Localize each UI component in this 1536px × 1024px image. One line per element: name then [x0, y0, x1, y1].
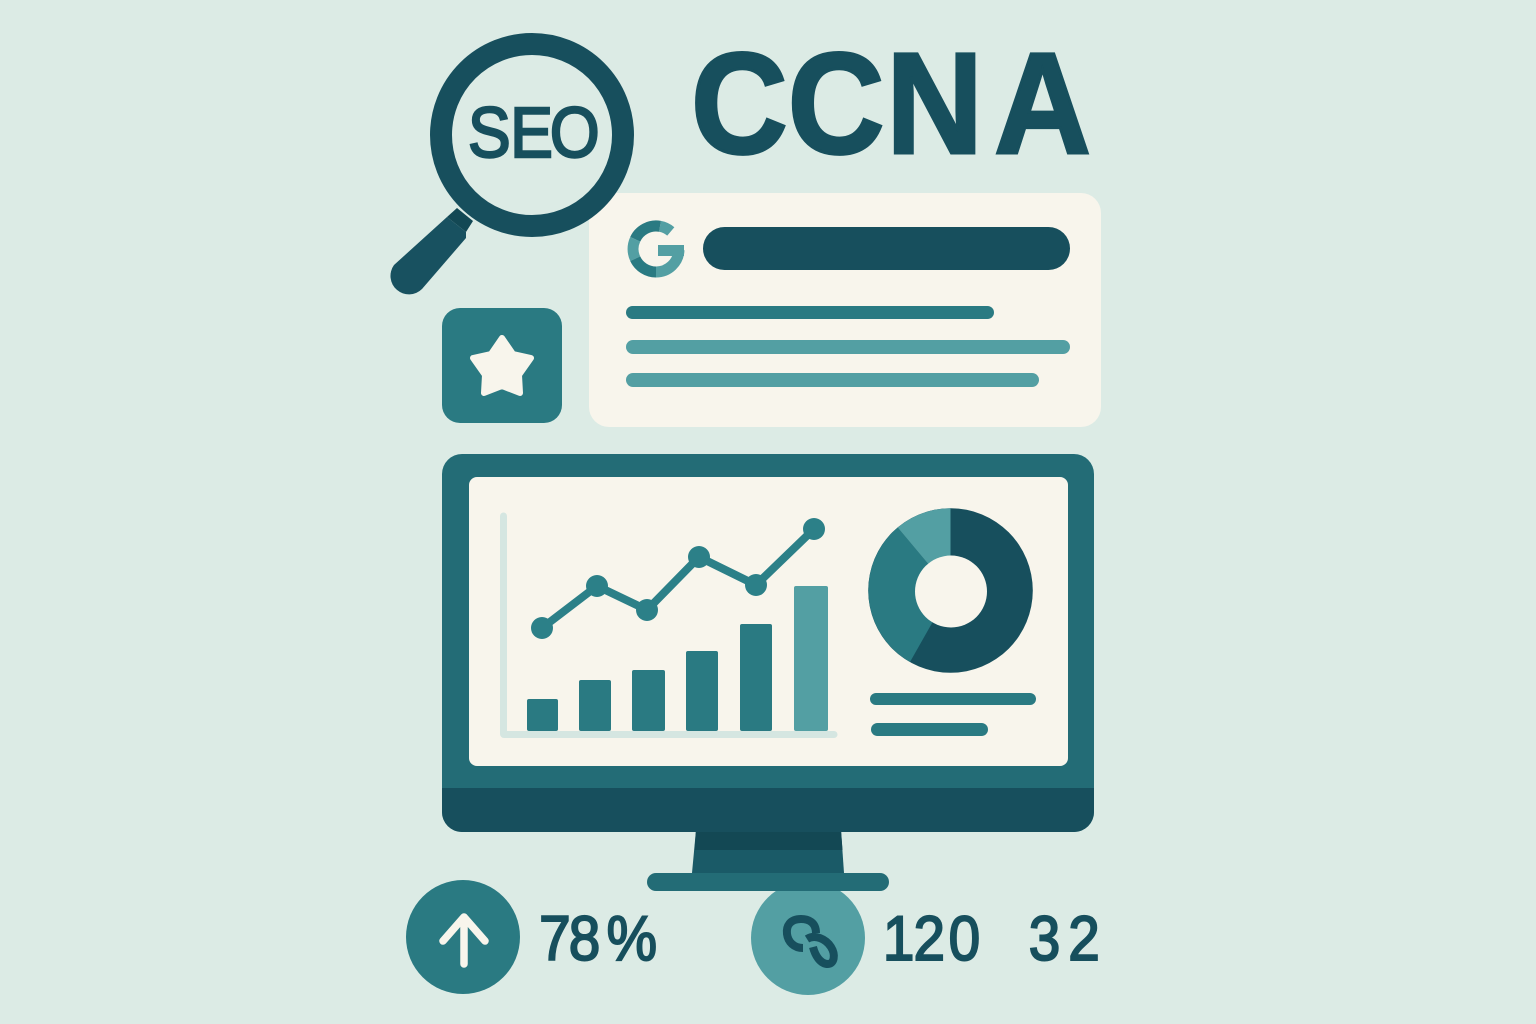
icon: star tile	[442, 308, 562, 423]
stat: 120: 120	[883, 903, 980, 974]
bar chart	[527, 586, 828, 731]
legend line 1	[870, 693, 1036, 705]
donut chart	[868, 508, 1033, 673]
icon: magnifying glass with SEO	[390, 44, 623, 294]
title: CCNA	[691, 24, 1091, 184]
result line 3	[626, 373, 1039, 387]
monitor base	[647, 873, 889, 891]
monitor	[442, 454, 1094, 832]
search bar	[703, 227, 1070, 270]
stat: 78%: 78%	[539, 903, 657, 974]
line chart	[531, 518, 825, 639]
icon: link	[787, 919, 834, 964]
result line 1	[626, 306, 994, 319]
circle: link badge	[751, 881, 865, 995]
icon: up arrow badge	[406, 880, 520, 994]
stat: 32: 32	[1029, 903, 1100, 974]
result line 2	[626, 340, 1070, 354]
chart axes	[500, 512, 838, 738]
legend line 2	[871, 723, 988, 736]
panel: search result card	[589, 193, 1101, 427]
icon: G logo	[633, 226, 684, 272]
label: SEO: SEO	[468, 94, 600, 173]
monitor stand	[692, 830, 844, 873]
screen	[469, 477, 1068, 766]
